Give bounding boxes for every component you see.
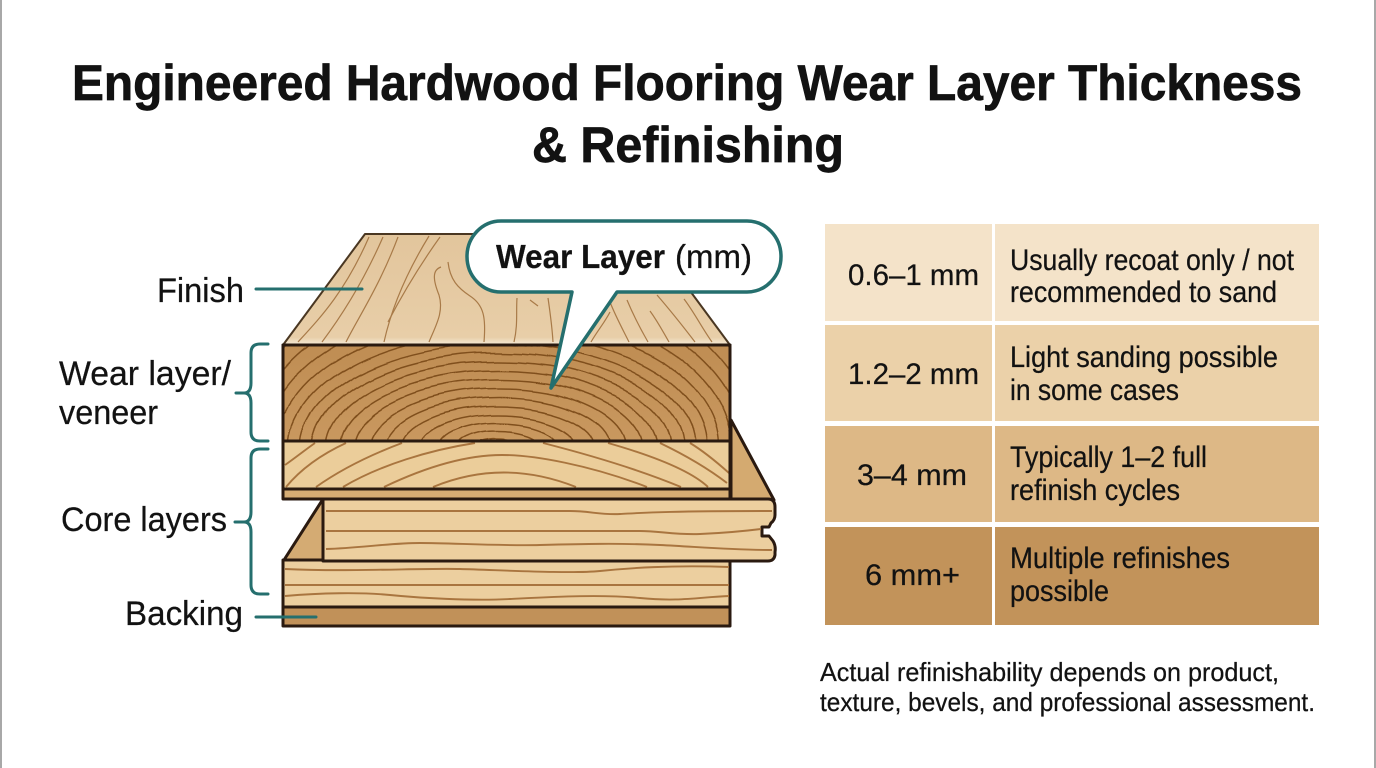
label: finish: Finish	[157, 272, 244, 310]
title	[72, 55, 1302, 173]
label: core layers	[61, 449, 268, 594]
label: wear layer / veneer: veneer	[59, 394, 158, 432]
row: 6 mm+	[825, 527, 1319, 625]
row: 1.2–2 mm: in some cases	[1010, 374, 1179, 407]
right side face of plank	[731, 420, 774, 500]
title: Engineered Hardwood Flooring Wear Layer Thickness	[72, 55, 1302, 111]
row: 1.2–2 mm: 1.2–2 mm	[848, 358, 979, 391]
label: core layers: Core layers	[61, 501, 227, 539]
footnote	[820, 657, 1315, 717]
row: 6 mm+: 6 mm+	[865, 559, 960, 592]
row: 3–4 mm: 3–4 mm	[857, 459, 967, 492]
row: 3–4 mm: refinish cycles	[1010, 474, 1180, 507]
label: wear layer / veneer	[59, 344, 268, 441]
row: 6 mm+: possible	[1010, 575, 1109, 608]
label: backing: Backing	[125, 595, 243, 633]
callout: wear layer: (mm)	[675, 238, 752, 275]
callout: wear layer: Wear Layer	[496, 238, 665, 275]
row: 1.2–2 mm	[825, 325, 1319, 421]
title: & Refinishing	[532, 117, 844, 173]
table: wear layer thickness and refinishing	[825, 224, 1319, 625]
backing layer	[283, 606, 730, 626]
core layer 2 with tongue and groove	[323, 499, 775, 561]
row: 6 mm+: Multiple refinishes	[1010, 542, 1230, 575]
row: 0.6–1 mm: 0.6–1 mm	[848, 259, 979, 292]
flooring cross-section diagram	[282, 233, 777, 628]
row: 3–4 mm: Typically 1–2 full	[1010, 441, 1207, 474]
core layer 3	[283, 560, 730, 607]
left side face of middle layer	[284, 499, 323, 560]
row: 0.6–1 mm: recommended to sand	[1010, 276, 1277, 309]
wear layer veneer	[282, 344, 732, 440]
label: wear layer / veneer: Wear layer/	[59, 355, 232, 393]
core layer 1	[283, 441, 730, 499]
top face: finish	[283, 234, 730, 345]
row: 1.2–2 mm: Light sanding possible	[1010, 341, 1278, 374]
callout: wear layer	[467, 221, 781, 388]
footnote: Actual refinishability depends on product,	[820, 657, 1279, 687]
row: 3–4 mm	[825, 426, 1319, 522]
footnote: texture, bevels, and professional assessment.	[820, 687, 1315, 717]
row: 0.6–1 mm: Usually recoat only / not	[1010, 244, 1295, 277]
row: 0.6–1 mm	[825, 224, 1319, 321]
